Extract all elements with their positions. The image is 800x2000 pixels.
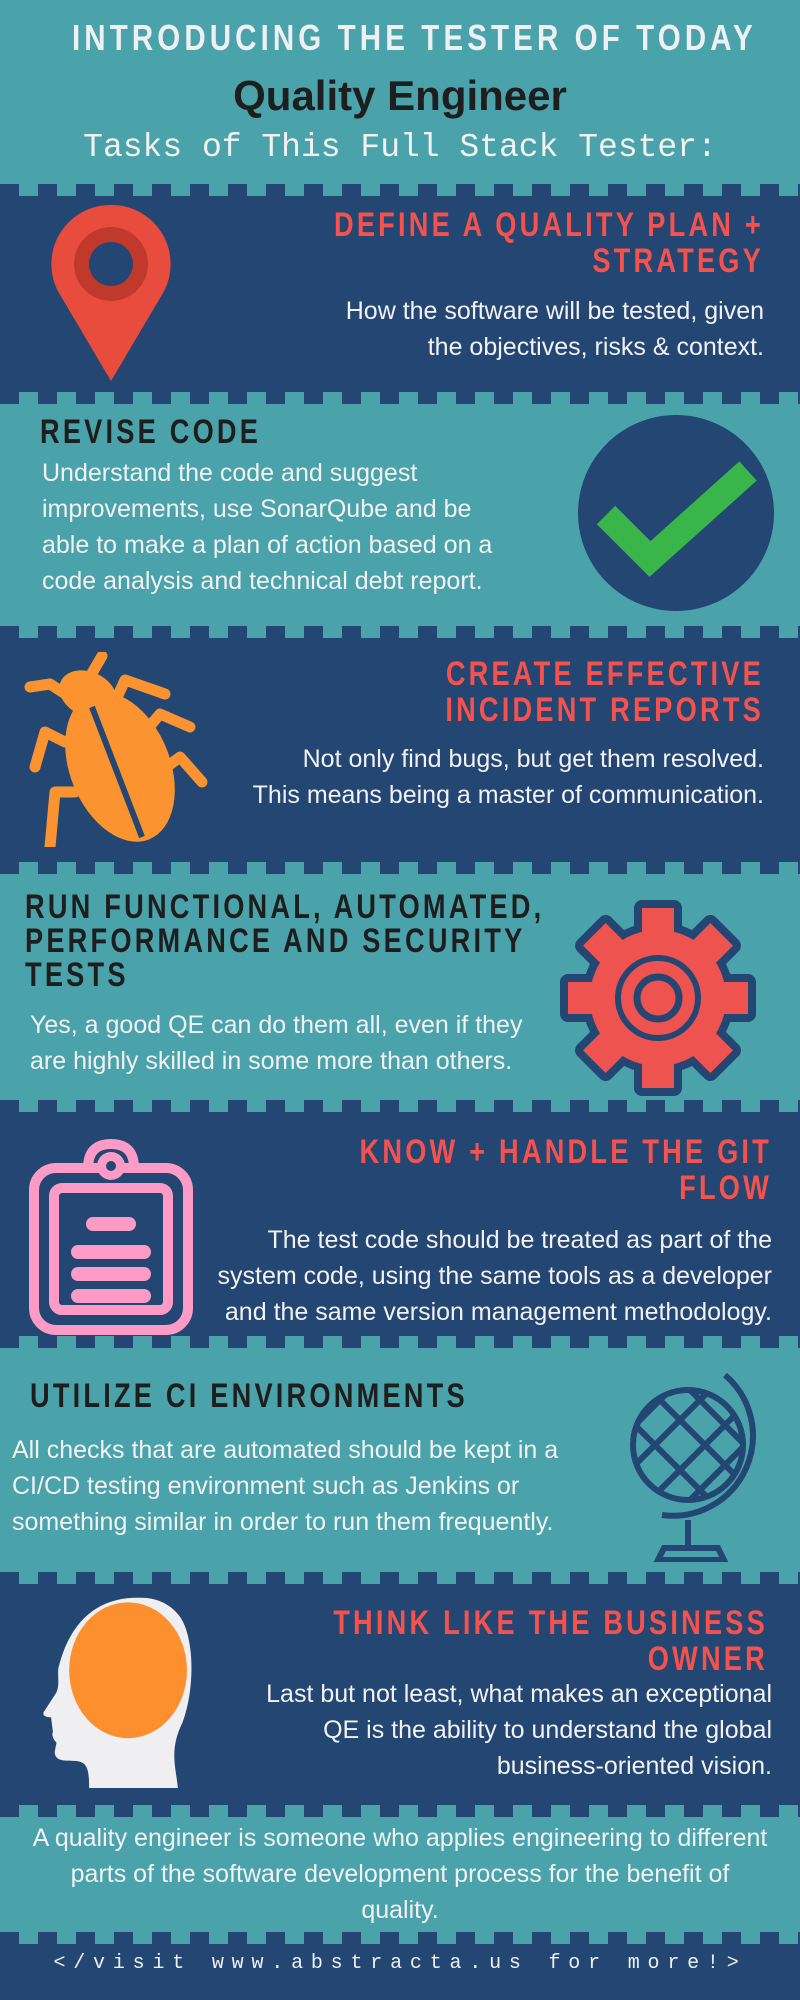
panel: quality plan [0,190,800,396]
panel: revise code [0,396,800,632]
text: CI environments [12,1436,558,1536]
text: summary: parts of the software development process for the benefit of [71,1860,729,1888]
text: git flow: The test code should be treated as part of the [268,1226,772,1254]
heading: run tests: RUN FUNCTIONAL, AUTOMATED, [25,888,544,926]
heading: run tests: PERFORMANCE AND SECURITY [25,922,525,960]
footer link: </visit www.abstracta.us for more!> [53,1952,747,1975]
icon: map pin [51,205,171,381]
title: INTRODUCING THE TESTER OF TODAY [72,17,757,58]
icon: clipboard [29,1139,193,1335]
text: revise code: improvements, use SonarQube and be [42,495,471,523]
text: revise code: code analysis and technical debt report. [42,567,483,595]
footer band [0,1937,800,2000]
text: git flow: and the same version management methodology. [225,1298,772,1326]
heading: incident reports [445,655,764,729]
text: run tests: are highly skilled in some more than others. [30,1047,512,1075]
panel: incident reports [0,632,800,868]
heading: incident reports: INCIDENT REPORTS [445,691,764,729]
icon: bug [24,652,208,847]
heading: business owner [333,1604,768,1678]
text: incident reports [253,745,764,809]
text: quality plan: the objectives, risks & context. [428,333,764,361]
panel: CI environments [0,1340,800,1574]
icon: globe [630,1372,756,1562]
text: summary: quality. [361,1896,439,1924]
heading: run tests: TESTS [25,956,129,994]
panel: run tests [0,868,800,1104]
heading: git flow: FLOW [679,1169,772,1207]
heading: run tests [25,888,544,994]
heading: git flow: KNOW + HANDLE THE GIT [360,1133,772,1171]
text: summary [32,1824,768,1924]
text: CI environments: CI/CD testing environment such as Jenkins or [12,1472,519,1500]
text: CI environments: All checks that are automated should be kept in a [12,1436,558,1464]
panel: summary [0,1810,800,1937]
text: git flow: system code, using the same tools as a developer [218,1262,772,1290]
text: quality plan [346,297,764,361]
text: business owner: business-oriented vision. [497,1752,772,1780]
heading: business owner: THINK LIKE THE BUSINESS [333,1604,768,1642]
text: revise code: able to make a plan of action based on a [42,531,492,559]
heading: revise code: REVISE CODE [40,413,261,451]
heading: quality plan [334,206,764,280]
text: incident reports: Not only find bugs, but get them resolved. [303,745,764,773]
text: CI environments: something similar in order to run them frequently. [12,1508,553,1536]
heading: quality plan: STRATEGY [592,242,764,280]
text: business owner [266,1680,772,1780]
text: revise code [42,459,492,595]
text: incident reports: This means being a master of communication. [253,781,764,809]
text: revise code: Understand the code and suggest [42,459,417,487]
text: quality plan: How the software will be tested, given [346,297,764,325]
icon: gear [560,900,756,1096]
panel: business owner [0,1574,800,1810]
heading: git flow [360,1133,772,1207]
icon: checkmark [578,415,774,611]
heading: business owner: OWNER [648,1640,768,1678]
tagline: Tasks of This Full Stack Tester: [83,129,717,166]
heading: quality plan: DEFINE A QUALITY PLAN + [334,206,764,244]
icon: head [43,1598,192,1788]
text: summary: A quality engineer is someone who applies engineering to different [33,1824,767,1852]
text: business owner: QE is the ability to understand the global [323,1716,772,1744]
subtitle: Quality Engineer [233,72,567,119]
text: run tests: Yes, a good QE can do them all, even if they [30,1011,522,1039]
heading: incident reports: CREATE EFFECTIVE [446,655,764,693]
text: run tests [30,1011,522,1075]
text: business owner: Last but not least, what makes an exceptional [266,1680,772,1708]
text: git flow [218,1226,772,1326]
heading: CI environments: UTILIZE CI ENVIRONMENTS [30,1377,468,1415]
panel: git flow [0,1104,800,1340]
